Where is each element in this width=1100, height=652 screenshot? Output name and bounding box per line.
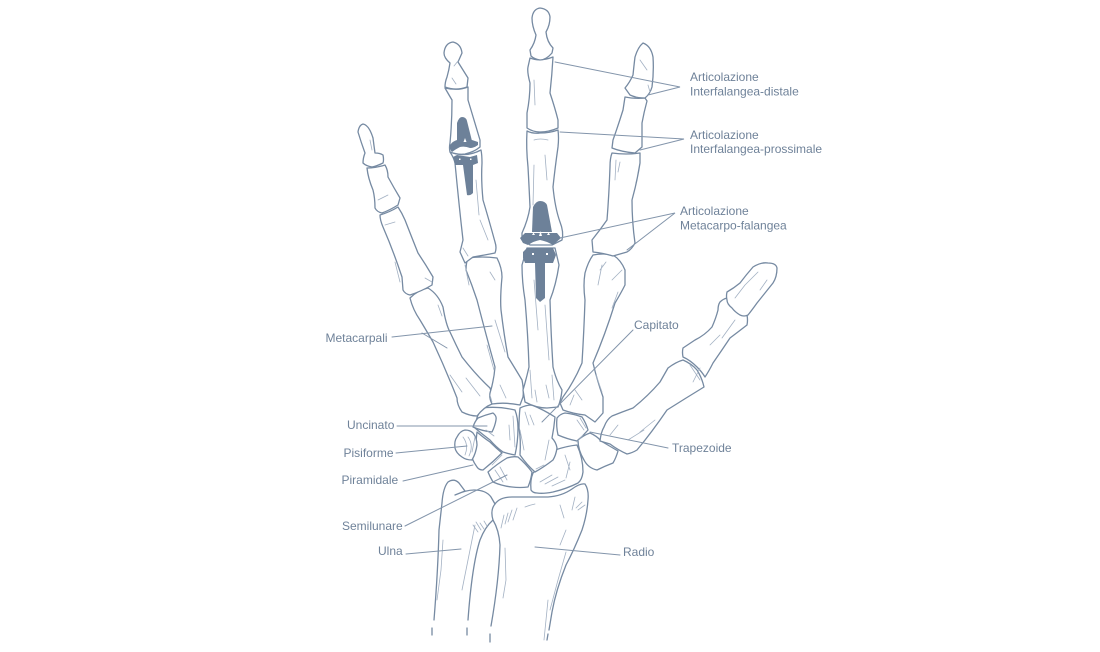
hook of hamate <box>473 413 496 432</box>
implant: ring finger prosthesis <box>450 117 478 195</box>
label: Trapezoide: Trapezoide <box>672 441 732 455</box>
label: Metacarpali: Metacarpali <box>326 331 388 345</box>
label: Semilunare: Semilunare <box>342 519 403 533</box>
label: Articolazione Interfalangea-distale: Articolazione <box>690 70 759 84</box>
implant highlights <box>532 231 550 255</box>
trapezium <box>578 433 618 470</box>
thumb proximal phalanx <box>682 298 748 377</box>
bones: ring finger <box>444 42 523 405</box>
implant: middle finger prosthesis <box>520 201 561 302</box>
bones: little finger <box>358 124 492 416</box>
bones: forearm (ulna and radius) <box>432 480 588 642</box>
pisiform <box>455 430 477 460</box>
label: Articolazione Interfalangea-prossimale: Articolazione <box>690 128 759 142</box>
ring proximal phalanx <box>450 150 496 263</box>
bones: thumb <box>600 263 777 454</box>
label: Articolazione Interfalangea-prossimale: Interfalangea-prossimale <box>690 142 822 156</box>
little distal phalanx <box>358 124 384 167</box>
implant stem upper <box>532 201 552 232</box>
thumb distal phalanx <box>726 263 777 316</box>
middle proximal phalanx <box>522 130 563 245</box>
label: Articolazione Interfalangea-distale: Interfalangea-distale <box>690 84 799 98</box>
middle phalanx <box>527 57 558 132</box>
scaphoid <box>531 445 583 493</box>
label: Uncinato: Uncinato <box>347 418 395 432</box>
middle metacarpal <box>522 248 562 408</box>
label: Articolazione Metacarpo-falangea: Articolazione <box>680 204 749 218</box>
bones: index finger <box>560 43 653 422</box>
label: Piramidale: Piramidale <box>342 473 399 487</box>
ring distal phalanx <box>444 42 468 89</box>
label: Capitato: Capitato <box>634 318 679 332</box>
label: Ulna: Ulna <box>378 544 403 558</box>
triquetrum <box>472 432 502 470</box>
implant stem upper <box>457 117 472 141</box>
leader lines <box>392 62 684 555</box>
implant joint plate <box>520 233 561 245</box>
index metacarpal <box>560 254 625 422</box>
bones: carpals <box>455 405 618 493</box>
label: Pisiforme: Pisiforme <box>344 446 394 460</box>
little proximal phalanx <box>380 207 433 295</box>
little middle phalanx <box>367 165 400 213</box>
ring metacarpal <box>466 257 523 405</box>
label: Articolazione Metacarpo-falangea: Metacarpo-falangea <box>680 218 787 232</box>
thumb metacarpal <box>600 360 704 454</box>
illustration: hand bones <box>358 8 777 642</box>
implant stem lower <box>453 155 478 195</box>
ring middle phalanx <box>445 87 480 154</box>
hamate <box>475 407 518 455</box>
capitate <box>519 405 557 472</box>
bones: middle finger <box>522 8 563 408</box>
index distal phalanx <box>625 43 653 98</box>
lunate <box>488 457 532 488</box>
implant joint plate <box>450 140 478 152</box>
index proximal phalanx <box>592 153 640 256</box>
index middle phalanx <box>612 97 647 153</box>
implant highlights <box>459 138 472 160</box>
label: Radio: Radio <box>623 545 655 559</box>
middle distal phalanx <box>530 8 553 60</box>
implant stem lower <box>523 248 556 302</box>
trapezoid <box>557 413 588 441</box>
little metacarpal <box>410 288 492 416</box>
